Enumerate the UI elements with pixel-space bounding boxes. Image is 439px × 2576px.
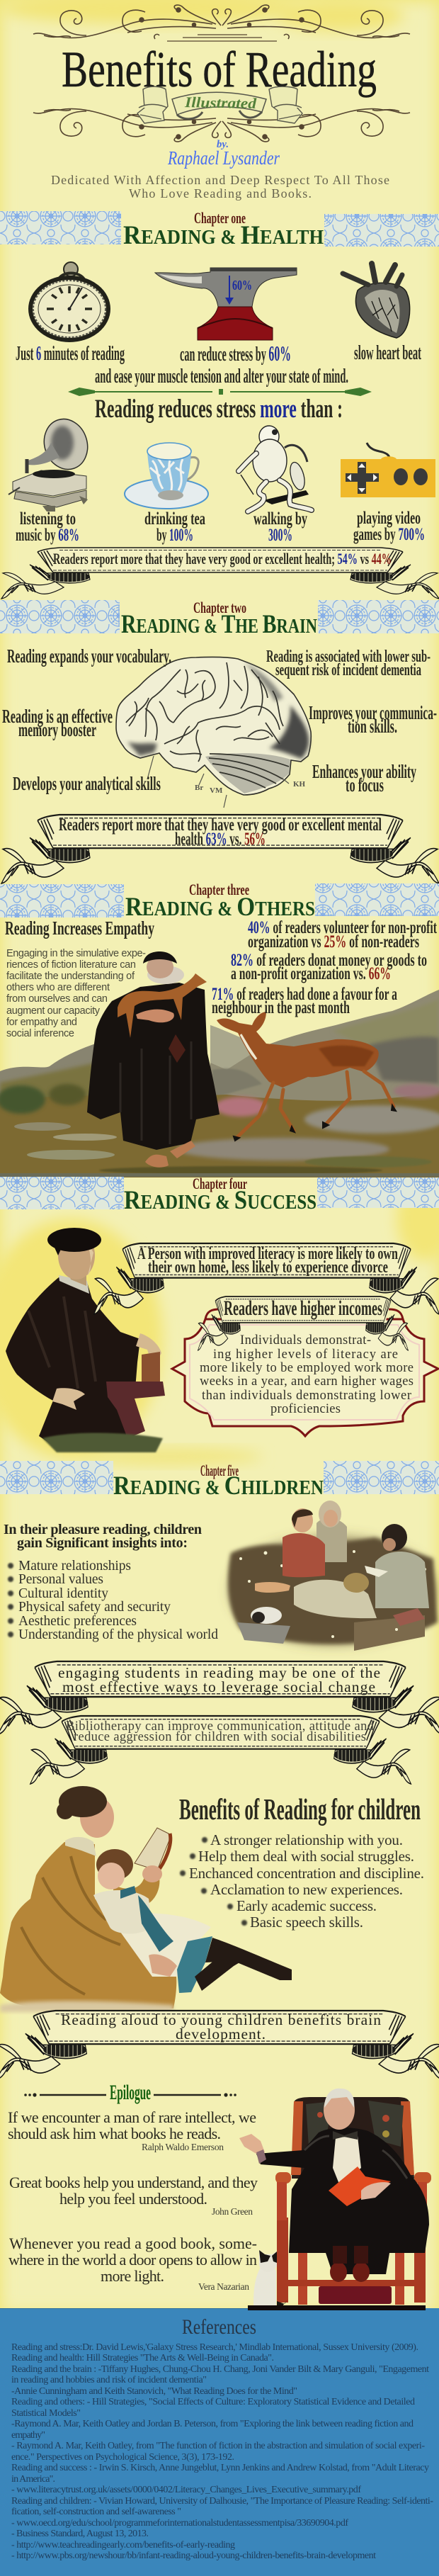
chapter two header	[0, 599, 439, 639]
epilogue	[8, 2081, 258, 2292]
quote: Green: Great books help you understand, and they	[9, 2174, 258, 2191]
icon: anatomical heart	[343, 264, 410, 338]
paragraph: riences of fiction literature can	[6, 959, 136, 971]
items: Physical safety and security	[18, 1600, 171, 1615]
byline: by.	[217, 139, 229, 150]
brain benefits: Reading expands your vocabulary.	[7, 645, 171, 667]
items: A stronger relationship with you.	[210, 1831, 403, 1848]
epilogue heading	[25, 2081, 235, 2104]
ribbon: reading aloud	[0, 2011, 439, 2079]
dedication	[51, 173, 389, 200]
painting: children reading	[228, 1501, 438, 1651]
references list: Reading and success : - Irwin S. Kirsch, Anne Jungeblut, Lynn Jenkins and Andrew Kolstad, from "Adult Literacy	[11, 2463, 429, 2473]
quote: Emerson: Ralph Waldo Emerson	[142, 2142, 224, 2152]
items: Basic speech skills.	[250, 1914, 363, 1931]
epilogue heading: Epilogue	[110, 2081, 151, 2104]
deer	[217, 1012, 396, 1141]
paragraph: Engaging in the simulative expe-	[6, 948, 146, 959]
references panel	[0, 2305, 439, 2576]
intro	[4, 1522, 202, 1551]
income frame: than individuals demonstrating lower	[202, 1389, 411, 1403]
items	[18, 1559, 218, 1642]
insights list	[4, 1522, 218, 1642]
chapter two header: Chapter two	[193, 599, 246, 616]
icon: game controller	[341, 443, 435, 497]
chapter five header	[0, 1461, 439, 1501]
cat	[253, 2250, 287, 2307]
references list: fication, self-construction and self-awareness "	[11, 2507, 181, 2517]
chapter three header: READING & OTHERS	[125, 893, 315, 922]
brain benefits: memory booster	[18, 719, 96, 740]
paragraph	[6, 948, 146, 1039]
icon: pocket watch	[30, 262, 108, 340]
income frame	[172, 1309, 438, 1436]
icon: walking frog	[239, 426, 312, 512]
icon: anvil: 60%	[232, 278, 252, 293]
quote: Emerson: should ask him what books he reads.	[8, 2125, 221, 2142]
items: Help them deal with social struggles.	[198, 1848, 414, 1865]
references list: Reading and stress:Dr. David Lewis,'Galaxy Stress Research,' Mindlab International, Sussex University (2009).	[11, 2342, 418, 2353]
items: Acclamation to new experiences.	[210, 1881, 403, 1898]
author: Raphael Lysander	[167, 147, 280, 169]
items: Mature relationships	[18, 1559, 131, 1574]
health captions: can reduce stress by 60%	[180, 341, 291, 366]
references list: empathy"	[11, 2430, 45, 2441]
chapter three header	[0, 881, 439, 922]
divider	[68, 388, 372, 396]
icon: gramophone	[8, 413, 94, 512]
chapter three header: Chapter three	[189, 881, 249, 898]
icon: anvil	[155, 268, 297, 340]
illustrated banner: Illustrated	[184, 94, 257, 112]
quote: Green: John Green	[212, 2206, 253, 2217]
references list: - http://www.teachreadingearly.com/benefits-of-early-reading	[11, 2540, 235, 2550]
income frame: more likely to be employed work more	[200, 1361, 414, 1375]
ribbon: social change	[0, 1661, 439, 1734]
benefits for children	[179, 1794, 424, 1931]
ribbon: higher incomes	[198, 1297, 408, 1350]
items: Aesthetic preferences	[18, 1614, 137, 1629]
brain part labels: Br	[195, 784, 203, 792]
quote: Nazarian: Vera Nazarian	[198, 2281, 249, 2292]
paragraph: social inference	[6, 1028, 74, 1039]
icon: book ornaments	[137, 86, 302, 123]
comparison labels: by 100%	[156, 526, 193, 545]
references list: -Annie Cunningham and Keith Stanovich, "What Reading Does for the Mind"	[11, 2386, 297, 2397]
brain benefits: Develops your analytical skills	[13, 773, 161, 794]
items: Understanding of the physical world	[18, 1627, 218, 1642]
income frame: proficiencies	[270, 1402, 341, 1416]
references heading: References	[182, 2315, 256, 2339]
paragraph: augment our capacity	[6, 1005, 101, 1017]
statistics	[212, 918, 437, 1017]
brain part labels	[195, 780, 306, 795]
references list: ence." Perspectives on Psychological Science, 3(3), 173-192.	[11, 2452, 234, 2463]
icon: tea cup	[125, 443, 208, 509]
intro: gain Significant insights into:	[17, 1535, 188, 1551]
dedication: Dedicated With Affection and Deep Respect To All Those	[51, 173, 389, 187]
monk figure	[87, 951, 219, 1168]
heading: reduces stress: Reading reduces stress more than :	[95, 395, 343, 424]
health captions: Just 6 minutes of reading	[16, 343, 125, 365]
references list: Reading and others: - Hill Strategies, "Social Effects of Culture: Exploratory Statistical Evidence and Detailed	[11, 2397, 415, 2407]
chapter four header: READING & SUCCESS	[124, 1186, 317, 1215]
brain part labels: KH	[293, 780, 306, 789]
ribbon: social change: most effective ways to leverage social change	[62, 1678, 375, 1695]
references list: Statistical Models"	[11, 2408, 81, 2419]
income frame: Individuals demonstrat-	[240, 1333, 371, 1348]
bullets	[8, 1563, 13, 1637]
ribbon: social change: engaging students in reading may be one of the	[58, 1664, 380, 1681]
chapter four header: Chapter four	[193, 1175, 247, 1192]
chapter one header: READING & HEALTH	[123, 221, 324, 250]
items: Early academic success.	[236, 1897, 377, 1914]
illustration: old man in chair with cat	[239, 2089, 431, 2310]
icon: brain	[116, 657, 311, 808]
ribbon: reading aloud: development.	[176, 2026, 266, 2043]
quote: Nazarian: Whenever you read a good book, some-	[9, 2235, 257, 2252]
ribbon: bibliotherapy	[30, 1716, 411, 1784]
references list: - www.literacytrust.org.uk/assets/0000/0402/Literacy_Changes_Lives_Executive_summary.pdf	[11, 2485, 361, 2495]
ribbon: bibliotherapy: reduce aggression for children with social disabilities	[74, 1730, 366, 1744]
items: Personal values	[18, 1572, 103, 1587]
quote: Green: help you feel understood.	[59, 2190, 207, 2208]
references list: - http://www.pbs.org/newshour/bb/infant-reading-aloud-young-children-benefits-brain-development	[11, 2550, 376, 2561]
references list: Reading and the brain : -Tiffany Hughes, Chung-Chou H. Chang, Joni Vander Bilt & Mary Ganguli, "Engagement	[11, 2364, 429, 2375]
landscape	[0, 990, 439, 1177]
paragraph: from ourselves and can	[6, 993, 108, 1005]
quote: Green	[9, 2174, 258, 2217]
income frame: ing higher levels of literacy are	[213, 1348, 398, 1362]
health captions	[16, 341, 421, 388]
references list: Reading and health: Hill Strategies "The Arts & Well-Being in Canada".	[11, 2353, 274, 2363]
illustrated banner	[172, 92, 266, 119]
references list: Reading and children: - Vivian Howard, University of Dalhousie, "The Importance of Pleasure Reading: Self-identi-	[11, 2496, 433, 2507]
intro: In their pleasure reading, children	[4, 1522, 202, 1537]
bottom flourish	[33, 108, 410, 142]
comparison labels: listening to	[20, 509, 76, 529]
brain benefits: tion skills.	[348, 716, 397, 737]
items: Enchanced concentration and discipline.	[189, 1865, 424, 1882]
comparison labels: walking by	[253, 509, 307, 529]
ribbon: bibliotherapy: Bibliotherapy can improve communication, attitude and	[66, 1719, 375, 1734]
title block	[33, 5, 410, 200]
ribbon: literacy	[94, 1243, 439, 1314]
quote: Nazarian: more light.	[101, 2267, 164, 2285]
top flourish	[33, 5, 410, 41]
comparison labels: 300%	[268, 526, 292, 545]
painting: monk and deer	[0, 951, 439, 1177]
ribbon: health	[1, 548, 439, 599]
chapter one header: Chapter one	[194, 209, 246, 227]
chapter five header: Chapter five	[200, 1462, 239, 1479]
quote: Emerson	[8, 2108, 256, 2152]
income frame: weeks in a year, and earn higher wages	[200, 1374, 414, 1389]
empathy text	[5, 917, 437, 1039]
ribbon: reading aloud: Reading aloud to young children benefits brain	[61, 2011, 381, 2028]
paragraph: for empathy and	[6, 1017, 77, 1028]
paragraph: facilitate the understanding of	[6, 971, 135, 982]
brain benefits	[2, 645, 437, 796]
quote: Nazarian	[8, 2235, 257, 2292]
chapter five header: READING & CHILDREN	[113, 1471, 324, 1501]
ribbon: mental health	[1, 815, 439, 883]
items: Cultural identity	[18, 1586, 108, 1601]
portrait: young man with book	[6, 1228, 165, 1452]
references list: in America".	[11, 2474, 55, 2485]
references list	[11, 2342, 433, 2561]
chapter four header	[0, 1175, 439, 1215]
references list: - www.oecd.org/edu/school/programmeforinternationalstudentassessmentpisa/33690904.pdf	[11, 2518, 348, 2529]
references list: in reading and hobbies and risk of incident dementia"	[11, 2375, 207, 2385]
paragraph: others who are different	[6, 982, 110, 993]
dedication: Who Love Reading and Books.	[129, 186, 312, 200]
bullets	[180, 1837, 247, 1926]
comparison labels	[16, 509, 425, 545]
chapter two header: READING & THE BRAIN	[121, 610, 317, 639]
references list: -Raymond A. Mar, Keith Oatley and Jordan B. Peterson, from "Exploring the link between reading fiction and	[11, 2419, 414, 2429]
comparison labels: music by 68%	[16, 526, 79, 545]
painting: mother and child	[0, 1786, 292, 2012]
brain benefits: Reading is an effective	[2, 706, 113, 727]
items	[189, 1831, 424, 1931]
quote: Emerson: If we encounter a man of rare intellect, we	[8, 2108, 256, 2126]
ribbon: mental health: health 63% vs. 56%	[175, 830, 266, 849]
chapter one header	[0, 209, 439, 250]
statistics: neighbour in the past month	[212, 998, 350, 1017]
brain part labels: VM	[210, 786, 223, 795]
references list: - Business Standard, August 13, 2013.	[11, 2529, 149, 2539]
comparison labels: drinking tea	[144, 509, 205, 529]
heading: Reading Increases Empathy	[5, 917, 154, 939]
brain benefits: to focus	[346, 774, 384, 796]
references list: - Raymond A. Mar, Keith Oatley, from "The function of fiction in the abstraction and simulation of social experi-	[11, 2441, 425, 2451]
quote: Nazarian: where in the world a door opens to allow in	[8, 2251, 257, 2269]
